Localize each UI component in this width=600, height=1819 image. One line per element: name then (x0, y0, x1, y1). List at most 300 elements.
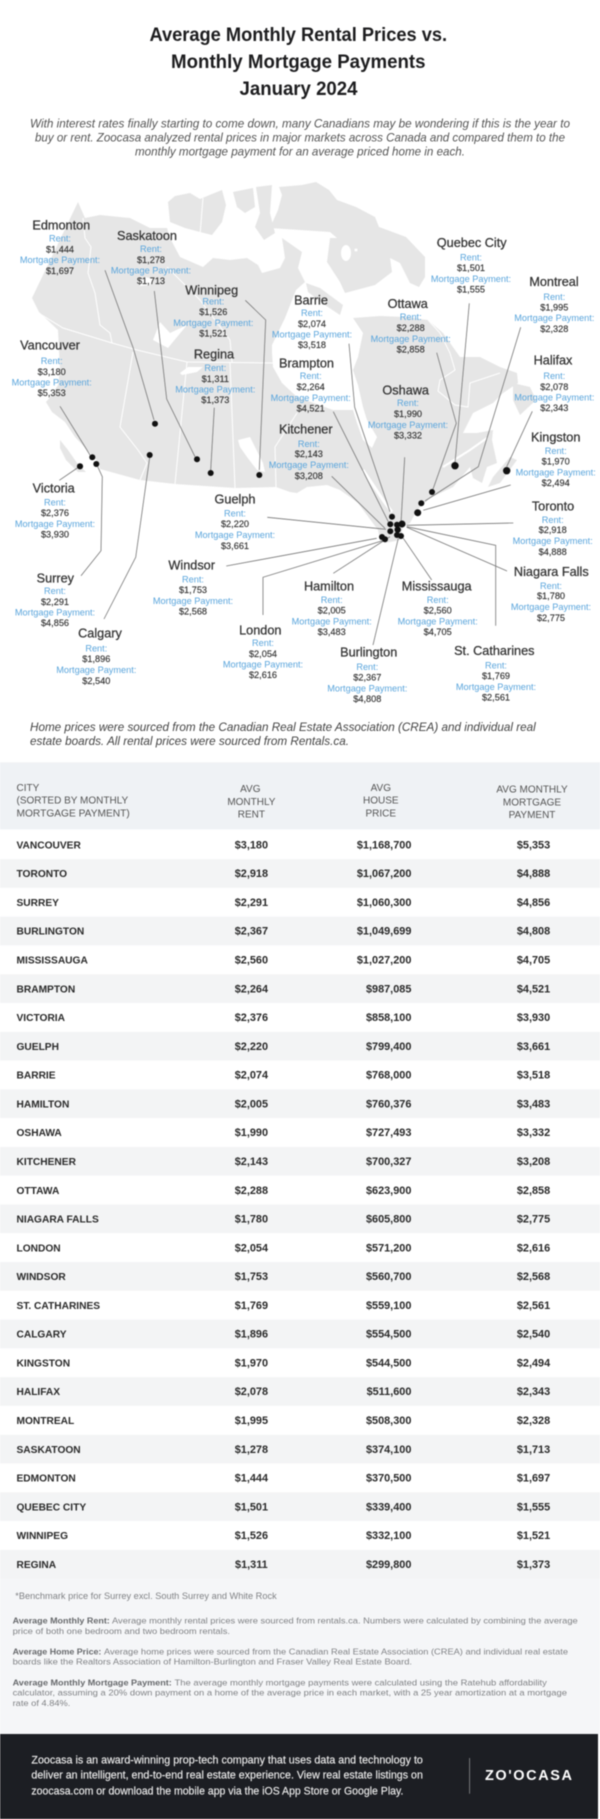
label: Mississauga (398, 580, 478, 637)
row: Barrie: $768,000 (366, 1070, 411, 1082)
row: Calgary (16, 1329, 550, 1341)
label: Windsor: Rent: (182, 574, 204, 584)
label: Regina: Mortgage Payment: (175, 384, 255, 394)
label: Montreal: Mortgage Payment: (514, 313, 594, 323)
label: Montreal: Montreal (529, 275, 579, 289)
label: Toronto: Toronto (532, 499, 574, 513)
label: London: Rent: (252, 638, 274, 648)
label: Kingston: Mortgage Payment: (516, 467, 596, 477)
title: Average Monthly Rental Prices vs. (149, 24, 447, 46)
row: Burlington: $4,808 (517, 926, 550, 938)
label: Mississauga: $2,560 (424, 605, 452, 615)
row: Victoria: VICTORIA (16, 1013, 66, 1024)
row: Mississauga: $4,705 (517, 954, 550, 966)
table header: CITY (16, 783, 40, 794)
label: Niagara Falls: Niagara Falls (514, 565, 589, 579)
label: Mississauga: Mississauga (402, 580, 473, 594)
label: Oshawa (368, 383, 448, 440)
row: Quebec City: QUEBEC CITY (16, 1502, 86, 1513)
row: Edmonton: EDMONTON (16, 1474, 76, 1485)
label: Calgary (56, 627, 136, 686)
row: Halifax: $2,078 (235, 1386, 268, 1398)
row: Montreal: $1,995 (235, 1415, 268, 1427)
row: Ottawa: $2,288 (235, 1185, 268, 1197)
source note: Home prices were sourced from the Canadian Real Estate Association (CREA) and individual real (30, 720, 536, 734)
label: Winnipeg: $1,526 (199, 307, 227, 317)
row: Niagara Falls (16, 1214, 550, 1226)
label: Victoria: Mortgage Payment: (15, 519, 95, 529)
city dots (77, 421, 510, 542)
map: land masses (32, 182, 536, 543)
row: Burlington: $2,367 (235, 926, 268, 938)
table header: AVG MONTHLY (496, 785, 568, 796)
footer text (31, 1754, 423, 1797)
row: Edmonton (16, 1473, 550, 1485)
row: Guelph: $799,400 (366, 1041, 411, 1053)
label: Victoria: Rent: (44, 497, 66, 507)
note: average home price: Average home prices were sourced from the Canadian Real Estate Association (CREA) and individual real estate (104, 1647, 568, 1657)
row: London: LONDON (16, 1243, 61, 1254)
label: Toronto (513, 499, 593, 557)
label: Kingston: Kingston (531, 430, 580, 444)
table header: AVG (371, 783, 391, 794)
row: Kingston: $2,494 (517, 1357, 550, 1369)
label: Edmonton: $1,697 (46, 266, 74, 276)
row: Mississauga: $2,560 (235, 954, 268, 966)
label: Surrey: $4,856 (41, 618, 69, 628)
label: Brampton: $2,264 (297, 382, 325, 392)
row: Ottawa: OTTAWA (16, 1186, 60, 1197)
label: Guelph: Mortgage Payment: (195, 530, 275, 540)
label: Surrey (15, 572, 95, 628)
row: Saskatoon: $1,713 (517, 1444, 550, 1456)
row: St. Catharines: $559,100 (366, 1300, 411, 1312)
footer text: zoocasa.com or download the mobile app via the iOS App Store or Google Play. (31, 1785, 403, 1797)
label: Halifax: Halifax (534, 353, 573, 367)
map: lakes (137, 245, 358, 472)
label: Saskatoon: Rent: (140, 244, 162, 254)
label: London (223, 623, 303, 680)
label: Victoria: Victoria (33, 482, 76, 496)
row: Montreal: $508,300 (366, 1415, 411, 1427)
table header (0, 762, 600, 829)
note: average monthly mortgage payment: Average Monthly Mortgage Payment: (13, 1678, 172, 1688)
label: Surrey: Surrey (37, 572, 75, 586)
row: Windsor: $2,568 (517, 1271, 550, 1283)
label: Windsor: Windsor (168, 559, 216, 573)
label: Winnipeg: $1,521 (199, 328, 227, 338)
label: Guelph: Guelph (215, 492, 255, 506)
label: Saskatoon: $1,713 (137, 276, 165, 286)
footer (0, 1734, 598, 1819)
table header: RENT (238, 809, 265, 820)
row: St. Catharines: $1,769 (235, 1300, 268, 1312)
row: Oshawa: $3,332 (517, 1127, 550, 1139)
note: average monthly rent (13, 1616, 578, 1636)
data table (0, 762, 600, 1578)
label: London: $2,616 (249, 670, 277, 680)
label: Winnipeg: Winnipeg (185, 284, 238, 298)
row: Brampton: $987,085 (366, 983, 411, 995)
label: Guelph: Rent: (224, 508, 246, 518)
label: Kitchener: Mortgage Payment: (269, 460, 349, 470)
label: Guelph: $2,220 (221, 519, 249, 529)
row: Barrie: $3,518 (517, 1070, 550, 1082)
label: Edmonton: Rent: (49, 234, 71, 244)
row: Vancouver (16, 839, 550, 851)
row: Regina: $1,311 (235, 1559, 268, 1571)
label: Calgary: Mortgage Payment: (56, 665, 136, 675)
row: Vancouver: $5,353 (517, 839, 550, 851)
row: Ottawa: $623,900 (366, 1185, 411, 1197)
row: Toronto: $4,888 (517, 868, 550, 880)
label: Oshawa: $3,332 (394, 430, 422, 440)
row: Niagara Falls: $2,775 (517, 1214, 550, 1226)
row: Saskatoon: SASKATOON (16, 1445, 81, 1456)
label: Barrie: $3,518 (298, 340, 326, 350)
label: Mississauga: Mortgage Payment: (398, 616, 478, 626)
label: St. Catharines: $1,769 (482, 671, 510, 681)
row: Regina: $1,373 (517, 1559, 550, 1571)
row: Mississauga (16, 954, 550, 966)
label: Niagara Falls: Mortgage Payment: (511, 602, 591, 612)
label: Toronto: $2,918 (539, 525, 567, 535)
row: Kitchener (16, 1156, 550, 1168)
label: Guelph: $3,661 (221, 541, 249, 551)
label: Edmonton: $1,444 (46, 244, 74, 254)
row: Edmonton: $1,697 (517, 1473, 550, 1485)
label: Barrie (272, 293, 352, 350)
row: Kingston: $1,970 (235, 1357, 268, 1369)
row: Oshawa: $727,493 (366, 1127, 411, 1139)
map: provincial borders (37, 198, 500, 512)
footer text: deliver an intelligent, end-to-end real estate experience. View real estate listings on (31, 1770, 423, 1782)
label: Niagara Falls: Rent: (540, 581, 562, 591)
row: Ottawa: $2,858 (517, 1185, 550, 1197)
row: Edmonton: $370,500 (366, 1473, 411, 1485)
row: Guelph: GUELPH (16, 1042, 59, 1053)
label: Toronto: Rent: (542, 515, 564, 525)
row: London (16, 1242, 550, 1254)
row: Halifax: $2,343 (517, 1386, 550, 1398)
row: Calgary: $2,540 (517, 1329, 550, 1341)
label: Kingston (516, 430, 596, 488)
table header: MONTHLY (227, 797, 276, 808)
label: Brampton (271, 357, 351, 413)
title: Monthly Mortgage Payments (171, 51, 426, 73)
label: Victoria: $3,930 (41, 529, 69, 539)
label: Toronto: Mortgage Payment: (513, 536, 593, 546)
label: Vancouver: $3,180 (38, 367, 66, 377)
row: Hamilton: $3,483 (517, 1098, 550, 1110)
label: Edmonton: Mortgage Payment: (20, 255, 100, 265)
label: Ottawa: $2,858 (397, 344, 425, 354)
label: Burlington: Mortgage Payment: (327, 683, 407, 693)
label: Oshawa: $1,990 (394, 409, 422, 419)
map of Canada (12, 182, 596, 704)
row: Barrie (16, 1070, 550, 1082)
row: Mississauga: $1,027,200 (357, 954, 411, 966)
row: Kitchener: $2,143 (235, 1156, 268, 1168)
row: Windsor: $560,700 (366, 1271, 411, 1283)
label: Edmonton: Edmonton (32, 218, 90, 232)
row: Quebec City: $339,400 (366, 1501, 411, 1513)
row: Kitchener: $3,208 (517, 1156, 550, 1168)
benchmark footnote: *Benchmark price for Surrey excl. South Surrey and White Rock (15, 1591, 277, 1601)
label: St. Catharines: St. Catharines (454, 644, 535, 658)
label: Calgary: Rent: (85, 643, 107, 653)
label: Victoria: $2,376 (41, 508, 69, 518)
row: St. Catharines (16, 1300, 550, 1312)
leader lines (59, 270, 532, 645)
label: Halifax: $2,078 (540, 382, 568, 392)
label: St. Catharines: Mortgage Payment: (456, 682, 536, 692)
label: Kitchener: Rent: (298, 439, 320, 449)
row: Quebec City: $1,501 (235, 1501, 268, 1513)
label: Kitchener: Kitchener (279, 422, 333, 436)
label: Regina: $1,311 (202, 374, 229, 384)
label: Windsor: Mortgage Payment: (153, 596, 233, 606)
row: Halifax: $511,600 (367, 1386, 411, 1398)
label: Halifax: Mortgage Payment: (514, 392, 594, 402)
row: Kingston: KINGSTON (16, 1358, 70, 1369)
row: Surrey: $1,060,300 (357, 897, 411, 909)
row: Brampton (16, 983, 550, 995)
row: Hamilton (16, 1098, 550, 1110)
logo: ZO'OCASA (485, 1768, 573, 1784)
row: Kitchener: KITCHENER (16, 1157, 77, 1168)
row: Toronto: $2,918 (235, 868, 268, 880)
row: Calgary: $554,500 (366, 1329, 411, 1341)
label: Kitchener: $3,208 (295, 471, 323, 481)
row: Quebec City (16, 1501, 550, 1513)
label: Calgary: $1,896 (82, 654, 110, 664)
row: Windsor: $1,753 (235, 1271, 268, 1283)
row: St. Catharines: ST. CATHARINES (16, 1301, 100, 1312)
label: Calgary: Calgary (78, 627, 123, 641)
label: Brampton: $4,521 (297, 403, 325, 413)
row: Oshawa: OSHAWA (16, 1128, 62, 1139)
note: average home price: boards like the Realtors Association of Hamilton-Burlington and Fraser Valley Real Estate Board. (13, 1657, 412, 1667)
row: Surrey: SURREY (16, 898, 59, 909)
note: average monthly mortgage payment: The average monthly mortgage payments were calculated using the Ratehub affordability (174, 1678, 548, 1688)
row: Halifax (16, 1386, 550, 1398)
table header: MORTGAGE (503, 797, 561, 808)
intro text: monthly mortgage payment for an average priced home in each. (135, 144, 465, 158)
label: Quebec City: Rent: (460, 252, 482, 262)
label: Ottawa: $2,288 (397, 323, 425, 333)
label: Regina: Regina (194, 347, 235, 361)
row: Vancouver: VANCOUVER (16, 840, 81, 851)
intro text (30, 116, 570, 158)
label: Surrey: Mortgage Payment: (15, 607, 95, 617)
row: Mississauga: MISSISSAUGA (16, 956, 88, 966)
label: Calgary: $2,540 (82, 676, 110, 686)
label: Halifax: $2,343 (540, 403, 568, 413)
row: Halifax: HALIFAX (16, 1387, 60, 1398)
row: Winnipeg (16, 1530, 550, 1542)
label: Quebec City: $1,501 (457, 263, 485, 273)
label: Regina: $1,373 (201, 395, 229, 405)
label: Saskatoon (111, 229, 191, 286)
note: average monthly mortgage payment: rate of 4.84%. (13, 1698, 70, 1708)
row: Surrey: $2,291 (235, 897, 268, 909)
note: average home price: Average Home Price: (13, 1647, 102, 1657)
label: Hamilton: Hamilton (304, 579, 354, 593)
row: Guelph: $2,220 (235, 1041, 268, 1053)
label: Kitchener (269, 422, 349, 481)
intro text: With interest rates finally starting to come down, many Canadians may be wondering if this is the year to (30, 116, 570, 130)
table header: AVG (240, 784, 261, 795)
table header: (SORTED BY MONTHLY (16, 796, 129, 807)
row: Edmonton: $1,444 (235, 1473, 268, 1485)
label: Victoria (15, 482, 95, 539)
note: average monthly rent: price of both one bedroom and two bedroom rentals. (13, 1626, 230, 1636)
label: Vancouver: Vancouver (20, 339, 81, 353)
label: Hamilton (292, 579, 372, 637)
row: Quebec City: $1,555 (517, 1501, 550, 1513)
row: Oshawa (16, 1127, 550, 1139)
label: Kingston: $2,494 (542, 478, 570, 488)
label: Burlington: $2,367 (353, 672, 381, 682)
row: Brampton: BRAMPTON (16, 984, 75, 995)
row: Ottawa (16, 1185, 550, 1197)
row: Regina: $299,800 (366, 1559, 411, 1571)
footer text: Zoocasa is an award-winning prop-tech company that uses data and technology to (31, 1754, 423, 1766)
row: Surrey (16, 897, 550, 909)
row: Kingston: $544,500 (366, 1357, 411, 1369)
label: St. Catharines: $2,561 (482, 692, 510, 702)
label: Saskatoon: Mortgage Payment: (111, 265, 191, 275)
label: Surrey: $2,291 (41, 597, 69, 607)
row: Winnipeg: WINNIPEG (16, 1531, 68, 1542)
row: Toronto (16, 868, 550, 880)
row: Surrey: $4,856 (517, 897, 550, 909)
label: Mississauga: $4,705 (424, 627, 452, 637)
source note (30, 720, 536, 748)
label: Ottawa: Rent: (400, 312, 422, 322)
label: Oshawa: Mortgage Payment: (368, 420, 448, 430)
row: Toronto: $1,067,200 (357, 868, 411, 880)
label: Quebec City: Mortgage Payment: (431, 274, 511, 284)
row: Montreal: MONTREAL (16, 1416, 74, 1427)
source note: estate boards. All rental prices were sourced from Rentals.ca. (30, 734, 349, 748)
table header: MORTGAGE PAYMENT) (16, 809, 130, 820)
row: Oshawa: $1,990 (235, 1127, 268, 1139)
label: Oshawa: Oshawa (382, 383, 430, 397)
row: Victoria (16, 1012, 550, 1024)
label: Regina (175, 347, 255, 405)
label: Hamilton: Rent: (321, 595, 343, 605)
label: St. Catharines (454, 644, 536, 702)
row: Windsor (16, 1271, 550, 1283)
table header: PRICE (366, 809, 396, 820)
label: Winnipeg: Rent: (202, 296, 224, 306)
label: Guelph (195, 492, 275, 551)
label: Barrie: Rent: (301, 308, 323, 318)
row: Niagara Falls: $605,800 (366, 1214, 411, 1226)
label: Burlington: $4,808 (353, 694, 381, 704)
title (149, 24, 447, 100)
label: Montreal: Rent: (543, 292, 565, 302)
row: Kingston (16, 1357, 550, 1369)
label: Windsor (153, 559, 233, 616)
methodology notes (0, 1578, 600, 1734)
label: Ottawa (371, 297, 451, 354)
label: Hamilton: Mortgage Payment: (292, 616, 372, 626)
label: Toronto: $4,888 (539, 547, 567, 557)
row: Burlington: BURLINGTON (16, 927, 84, 938)
label: Montreal: $2,328 (540, 324, 568, 334)
label: Quebec City: Quebec City (437, 236, 507, 250)
row: Niagara Falls: $1,780 (235, 1214, 268, 1226)
row: Kitchener: $700,327 (366, 1156, 411, 1168)
row: Guelph (16, 1041, 550, 1053)
row: Barrie: BARRIE (16, 1071, 56, 1082)
row: St. Catharines: $2,561 (517, 1300, 550, 1312)
table header: HOUSE (363, 796, 399, 807)
row: Montreal (16, 1415, 550, 1427)
row: Regina (16, 1559, 550, 1571)
note: average monthly rent: Average Monthly Rent: (13, 1616, 110, 1626)
label: Niagara Falls: $1,780 (537, 591, 565, 601)
row: Regina: REGINA (16, 1560, 57, 1571)
row: Calgary: CALGARY (16, 1330, 67, 1341)
label: Brampton: Rent: (300, 371, 322, 381)
label: Vancouver (12, 339, 92, 398)
table row stripes (0, 859, 600, 1578)
label: Windsor: $1,753 (179, 585, 207, 595)
row: Vancouver: $3,180 (235, 839, 268, 851)
label: Halifax: Rent: (543, 371, 565, 381)
row: Brampton: $4,521 (517, 983, 550, 995)
label: Burlington: Rent: (356, 662, 378, 672)
row: Hamilton: $760,376 (366, 1098, 411, 1110)
row: Saskatoon: $1,278 (235, 1444, 268, 1456)
label: Saskatoon: Saskatoon (117, 229, 177, 243)
label: Oshawa: Rent: (397, 398, 419, 408)
label: Winnipeg: Mortgage Payment: (173, 318, 253, 328)
row: Niagara Falls: NIAGARA FALLS (16, 1214, 99, 1226)
note: average monthly mortgage payment (13, 1678, 567, 1708)
row: Saskatoon (16, 1444, 550, 1456)
row: Victoria: $3,930 (517, 1012, 550, 1024)
row: London: $2,054 (235, 1242, 268, 1254)
title: January 2024 (240, 78, 358, 100)
label: Barrie: Mortgage Payment: (272, 329, 352, 339)
label: London: $2,054 (249, 649, 277, 659)
label: Vancouver: $5,353 (38, 388, 66, 398)
label: Winnipeg (173, 284, 253, 338)
label: Niagara Falls: $2,775 (537, 613, 565, 623)
row: Windsor: WINDSOR (16, 1272, 66, 1283)
label: Montreal (514, 275, 594, 334)
label: St. Catharines: Rent: (485, 660, 507, 670)
row: Burlington (16, 926, 550, 938)
label: Kitchener: $2,143 (295, 449, 323, 459)
label: London: London (239, 623, 281, 637)
label: Burlington: Burlington (340, 646, 397, 660)
row: Hamilton: HAMILTON (16, 1099, 69, 1110)
row: Saskatoon: $374,100 (366, 1444, 411, 1456)
row: Vancouver: $1,168,700 (357, 839, 411, 851)
label: Hamilton: $3,483 (318, 627, 346, 637)
row: Burlington: $1,049,699 (357, 926, 411, 938)
row: London: $2,616 (517, 1242, 550, 1254)
label: Niagara Falls (511, 565, 591, 623)
table header: PAYMENT (509, 810, 555, 821)
label: Mississauga: Rent: (427, 595, 449, 605)
